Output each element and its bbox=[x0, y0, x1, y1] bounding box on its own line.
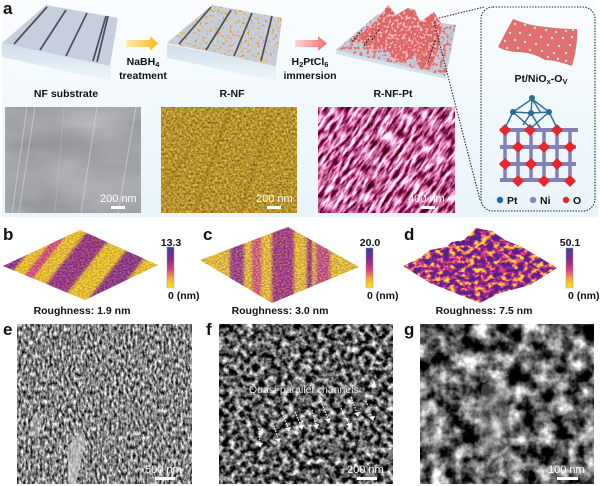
legend: atoms: O bbox=[573, 195, 581, 207]
label: R-NF: R-NF bbox=[219, 88, 245, 100]
image: R-NF AFM bbox=[161, 107, 297, 213]
image: SEM e bbox=[17, 324, 192, 484]
arrow: H2PtCl6 step bbox=[295, 36, 327, 51]
label f: f bbox=[206, 320, 212, 339]
callout: dotted zoom box bbox=[434, 7, 595, 211]
colorbar d bbox=[560, 237, 600, 302]
colorbar b bbox=[161, 237, 200, 302]
label c: c bbox=[203, 225, 212, 244]
label: Pt/NiOx-Ov: x bbox=[547, 77, 552, 86]
label: Pt/NiOx-Ov: Pt/NiO bbox=[515, 73, 547, 85]
image: R-NF-Pt AFM: 400 nm bbox=[408, 193, 445, 205]
image: SEM f bbox=[219, 324, 393, 484]
legend: atoms: Pt bbox=[507, 195, 518, 207]
chart: AFM surface b bbox=[3, 230, 158, 300]
image: NF SEM: 200 nm bbox=[100, 193, 137, 205]
label b: b bbox=[3, 225, 13, 244]
colorbar c: 0 (nm) bbox=[367, 290, 398, 302]
image: R-NF-Pt AFM bbox=[318, 107, 455, 213]
label e: e bbox=[3, 320, 12, 339]
icon: Pt/NiOx sheet bbox=[498, 19, 577, 66]
image: SEM e: 500 nm bbox=[145, 464, 182, 476]
icon: NF substrate block bbox=[2, 5, 118, 81]
text: NaBH4 treatment: NaBH bbox=[127, 56, 155, 68]
text: H2PtCl6 immersion: 6 bbox=[324, 60, 328, 69]
label: NF substrate: NF substrate bbox=[34, 88, 98, 100]
text: H2PtCl6 immersion: H bbox=[292, 56, 299, 68]
caption b: Roughness: 1.9 nm bbox=[34, 305, 130, 317]
panel a: background bbox=[2, 1, 598, 217]
image: R-NF AFM: 200 nm bbox=[256, 193, 293, 205]
image: SEM g bbox=[420, 324, 594, 484]
chart: AFM surface d bbox=[403, 228, 557, 303]
caption c: Roughness: 3.0 nm bbox=[232, 305, 328, 317]
arrow: NaBH4 step bbox=[126, 36, 158, 51]
icon: R-NF-Pt block bbox=[334, 3, 458, 79]
colorbar d: 0 (nm) bbox=[568, 290, 600, 302]
text: NaBH4 treatment: treatment bbox=[119, 70, 167, 82]
colorbar c: 20.0 bbox=[360, 237, 380, 249]
chart: AFM surface c bbox=[200, 227, 359, 303]
image: SEM f: 200 nm bbox=[347, 464, 384, 476]
text: NaBH4 treatment: 4 bbox=[155, 60, 160, 69]
label: R-NF-Pt: R-NF-Pt bbox=[373, 88, 413, 100]
icon: crystal structure bbox=[499, 95, 578, 187]
label: Pt/NiOx-Ov: V bbox=[562, 77, 567, 86]
colorbar b: 13.3 bbox=[161, 237, 181, 249]
colorbar d: 50.1 bbox=[560, 237, 580, 249]
caption d: Roughness: 7.5 nm bbox=[436, 305, 532, 317]
image: NF SEM bbox=[5, 107, 141, 213]
label: Pt/NiOx-Ov: -O bbox=[551, 73, 562, 85]
label g: g bbox=[404, 320, 414, 339]
text: H2PtCl6 immersion: 2 bbox=[299, 60, 303, 69]
legend: atoms: Ni bbox=[540, 195, 551, 207]
image: SEM g: 100 nm bbox=[548, 464, 585, 476]
colorbar c bbox=[360, 237, 398, 302]
annotation: quasi-parallel channels: Quasi-parallel channels bbox=[249, 384, 359, 396]
icon: R-NF block bbox=[165, 3, 285, 81]
legend: atoms bbox=[497, 195, 581, 207]
annotation: quasi-parallel channels bbox=[249, 384, 375, 447]
colorbar b: 0 (nm) bbox=[168, 290, 200, 302]
text: H2PtCl6 immersion: PtCl bbox=[303, 56, 324, 68]
text: H2PtCl6 immersion: immersion bbox=[283, 70, 337, 82]
label d: d bbox=[404, 225, 414, 244]
